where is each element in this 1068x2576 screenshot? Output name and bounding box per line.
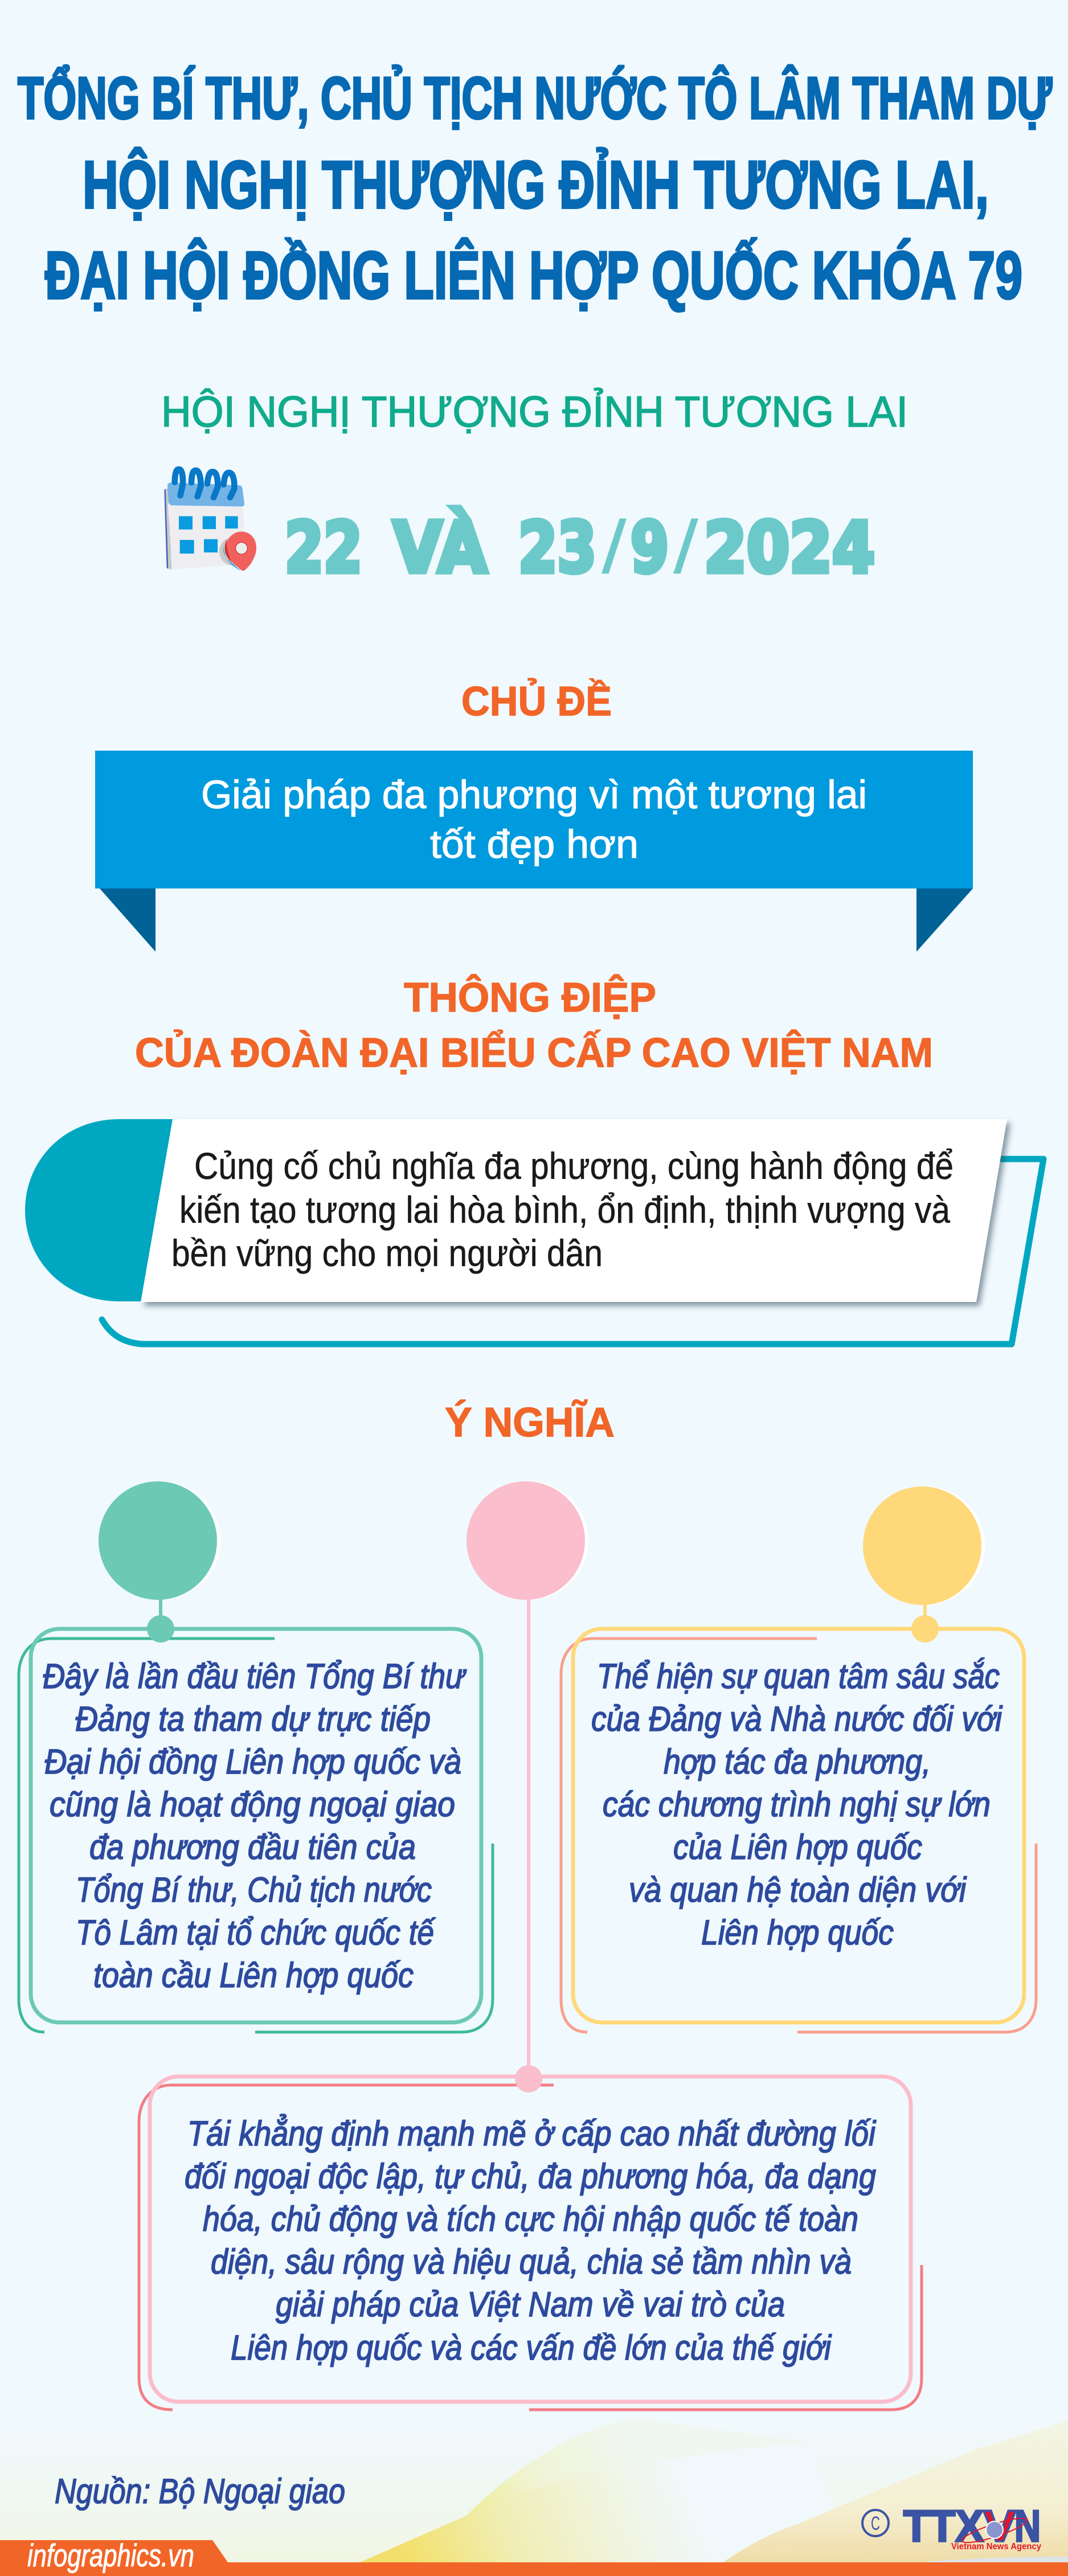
green text: toàn cầu Liên hợp quốc bbox=[93, 1956, 414, 1995]
pink text: diện, sâu rộng và hiệu quả, chia sẻ tầm nhìn và bbox=[211, 2242, 852, 2281]
yellow text bbox=[591, 1657, 1002, 1952]
copyright mark bbox=[862, 2510, 889, 2536]
ribbon folds bbox=[100, 888, 973, 952]
red outer lines bbox=[139, 2085, 922, 2410]
green text bbox=[43, 1657, 467, 1995]
callout text bbox=[171, 1145, 954, 1274]
panel: yellow meaning bbox=[561, 1486, 1036, 2032]
yellow text: Liên hợp quốc bbox=[701, 1913, 894, 1952]
green text: Tổng Bí thư, Chủ tịch nước bbox=[76, 1870, 432, 1909]
pink text: đối ngoại độc lập, tự chủ, đa phương hóa, đa dạng bbox=[185, 2157, 876, 2196]
ribbon band bbox=[95, 751, 973, 888]
date: VÀ bbox=[393, 507, 487, 588]
green outer lines bbox=[19, 1639, 493, 2032]
footer site name: infographics.vn bbox=[27, 2537, 194, 2573]
title bbox=[18, 65, 1053, 313]
salmon outer lines bbox=[561, 1639, 1036, 2032]
heading: chu de: CHỦ ĐỀ bbox=[461, 678, 612, 724]
copyright mark: C bbox=[871, 2513, 880, 2534]
wordmark: V bbox=[983, 2501, 1016, 2551]
date: 2024 bbox=[704, 507, 875, 588]
date: 22 bbox=[285, 507, 362, 588]
footer tab bbox=[0, 2540, 228, 2562]
pink circle bbox=[467, 1481, 588, 1600]
pink text: Tái khẳng định mạnh mẽ ở cấp cao nhất đường lối bbox=[187, 2114, 876, 2153]
date bbox=[285, 505, 875, 589]
heading: thong diep bbox=[135, 974, 933, 1076]
yellow circle bbox=[863, 1486, 985, 1605]
wordmark: N bbox=[1014, 2501, 1041, 2551]
callout outline bbox=[102, 1159, 1044, 1344]
date: 9 bbox=[631, 507, 669, 588]
green circle bbox=[99, 1481, 220, 1600]
green text: Tô Lâm tại tổ chức quốc tế bbox=[76, 1913, 436, 1952]
green text: Đảng ta tham dự trực tiếp bbox=[75, 1699, 431, 1738]
globe bbox=[960, 2514, 1029, 2547]
yellow box bbox=[573, 1629, 1024, 2022]
pink box bbox=[150, 2077, 911, 2402]
ribbon text: tốt đẹp hơn bbox=[430, 822, 639, 866]
footer bar bbox=[0, 2537, 1068, 2576]
green text: đa phương đầu tiên của bbox=[89, 1828, 416, 1866]
pink text: hóa, chủ động và tích cực hội nhập quốc tế toàn bbox=[203, 2200, 858, 2238]
green text: Đại hội đồng Liên hợp quốc và bbox=[44, 1742, 461, 1781]
callout teal cap bbox=[25, 1119, 216, 1301]
wordmark bbox=[903, 2501, 1041, 2551]
callout text: bền vững cho mọi người dân bbox=[171, 1232, 603, 1274]
subtitle: HỘI NGHỊ THƯỢNG ĐỈNH TƯƠNG LAI bbox=[161, 388, 908, 436]
callout text: kiến tạo tương lai hòa bình, ổn định, thịnh vượng và bbox=[179, 1189, 950, 1231]
date: / bbox=[601, 505, 627, 589]
ribbon text bbox=[201, 772, 867, 866]
bottom decorative sweep bbox=[0, 2364, 1068, 2563]
callout card bbox=[141, 1119, 1007, 1302]
yellow text: các chương trình nghị sự lớn bbox=[603, 1785, 991, 1824]
yellow text: hợp tác đa phương, bbox=[664, 1742, 931, 1781]
pink text: giải pháp của Việt Nam về vai trò của bbox=[276, 2285, 785, 2324]
date: 23 bbox=[518, 507, 596, 588]
wordmark: TTX bbox=[903, 2501, 984, 2551]
yellow text: của Đảng và Nhà nước đối với bbox=[591, 1699, 1002, 1738]
heading: thong diep: THÔNG ĐIỆP bbox=[404, 974, 656, 1021]
icon: calendar with location pin bbox=[164, 469, 256, 571]
pink text bbox=[185, 2114, 876, 2367]
ribbon text: Giải pháp đa phương vì một tương lai bbox=[201, 772, 867, 817]
green connector bbox=[147, 1598, 174, 1643]
heading: thong diep: CỦA ĐOÀN ĐẠI BIỂU CẤP CAO VIỆT NAM bbox=[135, 1030, 933, 1076]
yellow text: Thể hiện sự quan tâm sâu sắc bbox=[597, 1657, 1000, 1696]
yellow connector bbox=[911, 1603, 939, 1643]
green text: Đây là lần đầu tiên Tổng Bí thư bbox=[43, 1657, 467, 1696]
yellow text: và quan hệ toàn diện với bbox=[629, 1870, 967, 1909]
heading: y nghia: Ý NGHĨA bbox=[445, 1399, 615, 1445]
green box bbox=[31, 1629, 481, 2022]
panel: message callout bbox=[25, 1119, 1044, 1344]
callout text: Củng cố chủ nghĩa đa phương, cùng hành động để bbox=[194, 1145, 954, 1187]
pink text: Liên hợp quốc và các vấn đề lớn của thế giới bbox=[231, 2328, 832, 2367]
agency name: Vietnam News Agency bbox=[951, 2542, 1041, 2552]
panel: green meaning bbox=[19, 1481, 493, 2032]
logo: TTXVN bbox=[862, 2501, 1041, 2552]
date: / bbox=[673, 505, 698, 589]
pink dot bbox=[515, 2065, 542, 2092]
yellow text: của Liên hợp quốc bbox=[673, 1828, 922, 1866]
panel: theme ribbon bbox=[95, 751, 973, 952]
pink connector bbox=[527, 1598, 530, 2067]
green text: cũng là hoạt động ngoại giao bbox=[50, 1785, 455, 1824]
source note: Nguồn: Bộ Ngoại giao bbox=[55, 2472, 345, 2511]
panel: pink meaning bbox=[139, 1481, 922, 2410]
